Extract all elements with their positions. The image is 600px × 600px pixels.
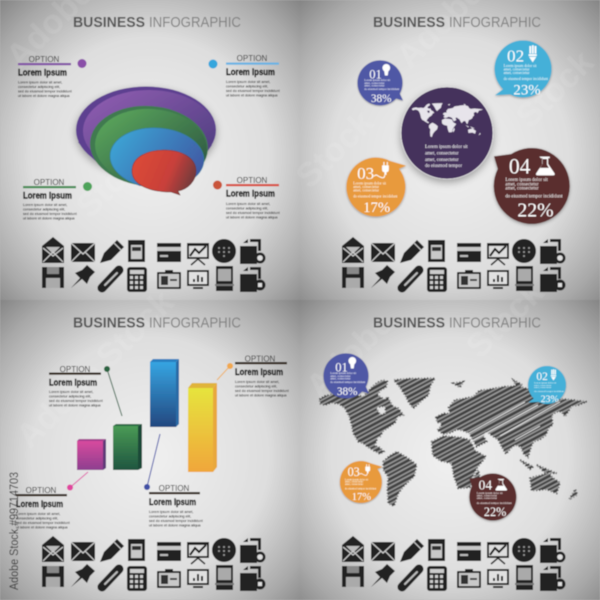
option: pink connector: Lorem ipsum dolor sit amet, — [16, 512, 60, 516]
icons: panel 3 — [42, 536, 266, 591]
option: pink connector: sed do eiusmod tempor incididunt — [16, 521, 70, 525]
bubble: 01 38%: 38% — [371, 93, 391, 105]
icon: mini world map — [412, 103, 483, 137]
option: blue: Lorem Ipsum — [226, 67, 275, 78]
option: purple: OPTION — [29, 55, 60, 64]
title: panel 2 — [373, 14, 541, 31]
bubble: map 03 17%: amet, consectetur — [345, 481, 363, 484]
option: red — [213, 176, 280, 220]
bubble: map 03 17%: Lorem ipsum dolor sit — [345, 478, 368, 481]
bubble: 01 38%: do eiusmod tempor incididunt — [364, 87, 399, 91]
option: orange connector: Lorem ipsum dolor sit amet, — [235, 380, 279, 384]
bubble: map 03 17%: 03 — [348, 465, 360, 479]
option: dark green connector: Lorem ipsum dolor sit amet, — [49, 390, 93, 394]
stock watermarks: Stock — [509, 43, 600, 136]
option: blue connector: OPTION — [159, 484, 190, 493]
bubble: 04 22%: do eiusmod tempor incididunt — [505, 194, 563, 199]
option: pink connector — [16, 472, 88, 530]
bubble: map 01 38% — [323, 353, 369, 398]
stock credit vertical: Adobe Stock #99714703 — [9, 472, 21, 590]
title: panel 1 — [73, 14, 241, 31]
option: dark green connector: OPTION — [60, 365, 91, 374]
bubble: 02 23%: amet, consectetur — [504, 71, 530, 76]
bubble: 02 23% — [495, 40, 552, 99]
bubble: 04 22%: amet, consectetur — [505, 182, 539, 187]
bubble: map 01 38%: Lorem ipsum dolor sit — [330, 371, 356, 375]
option: blue: OPTION — [237, 54, 268, 63]
bubble: 03 17%: do eiusmod tempor incididunt — [353, 195, 397, 199]
circle: world map centre: amet, consectetur — [425, 158, 459, 163]
chart: layered speech bubbles — [76, 86, 216, 195]
option: red: ut labore et dolore magna aliqua — [226, 216, 278, 220]
circle: world map centre: Lorem ipsum dolor sit — [425, 145, 468, 150]
option: dark green connector — [49, 365, 122, 416]
option: dark green connector: sed do eiusmod tempor incididunt — [49, 399, 103, 403]
option: blue connector: Lorem ipsum dolor sit amet, — [149, 510, 193, 514]
bubble: 04 22%: 22% — [517, 199, 554, 221]
stock watermarks: Stock — [69, 133, 161, 226]
title: panel 3: INFOGRAPHIC — [149, 314, 241, 332]
option: blue connector: consectetur adipiscing elit, — [149, 514, 191, 518]
option: blue: ut labore et dolore magna aliqua — [226, 94, 278, 98]
option: green: OPTION — [34, 178, 65, 187]
bar: yellow — [188, 383, 217, 472]
world map: scribbled — [319, 378, 587, 506]
bubble: 02 23%: Lorem ipsum dolor sit — [504, 64, 537, 68]
bubble: map 04 22%: amet, consectetur — [477, 496, 497, 501]
title: panel 2: INFOGRAPHIC — [449, 14, 541, 31]
bubble: map 02 23%: do eiusmod tempor incididunt — [534, 390, 564, 393]
bubble: 04 22%: 04 — [509, 154, 531, 178]
option: green: consectetur adipiscing elit, — [23, 208, 65, 212]
bubble: map 04 22% — [469, 473, 516, 520]
title: panel 1: INFOGRAPHIC — [149, 14, 241, 31]
bubble: 03 17% — [346, 158, 406, 217]
title: panel 1: BUSINESS — [73, 14, 145, 31]
option: green: Lorem ipsum dolor sit amet, — [23, 203, 67, 207]
bar: green — [113, 424, 142, 470]
bubble: map 04 22%: 04 — [479, 477, 492, 492]
bubble: 03 17%: amet, consectetur — [353, 188, 380, 193]
option: dark green connector: ut labore et dolore magna aliqua — [49, 404, 101, 408]
bubble: map 02 23%: Lorem ipsum dolor sit — [534, 382, 556, 385]
circle: world map centre — [401, 87, 493, 179]
option: purple: sed do eiusmod tempor incididunt — [18, 90, 72, 94]
bar: pink — [77, 439, 106, 470]
bubble: map 04 22%: do eiusmod tempor incididunt — [477, 501, 512, 505]
bubble: 01 38%: amet, consectetur — [364, 81, 385, 86]
option: green: sed do eiusmod tempor incididunt — [23, 212, 77, 216]
option: green: ut labore et dolore magna aliqua — [23, 216, 75, 220]
bubble: map 01 38%: 01 — [335, 360, 348, 374]
circle: world map centre: amet, consectetur — [425, 152, 459, 156]
option: pink connector: Lorem Ipsum — [16, 499, 63, 510]
option: dark green connector: Lorem Ipsum — [49, 378, 97, 388]
option: orange connector: ut labore et dolore magna aliqua — [235, 394, 287, 398]
bubble: map 04 22%: amet, consectetur — [477, 494, 497, 499]
bubble: 01 38%: Lorem ipsum dolor sit — [364, 78, 390, 82]
bubble: 01 38% — [357, 60, 403, 105]
option: orange connector — [217, 354, 289, 398]
bubble: map 02 23% — [528, 366, 566, 405]
option: green: Lorem Ipsum — [23, 190, 72, 202]
option: orange connector: sed do eiusmod tempor incididunt — [235, 389, 289, 393]
bubble: 02 23%: 23% — [513, 83, 541, 99]
option: purple — [18, 55, 86, 98]
option: orange connector: Lorem Ipsum — [235, 367, 283, 378]
bubble: 04 22%: Lorem ipsum dolor sit — [505, 178, 548, 183]
bubble: map 02 23%: amet, consectetur — [534, 384, 552, 387]
bubble: 04 22%: amet, consectetur — [505, 186, 539, 191]
option: blue connector — [144, 434, 203, 528]
option: red: OPTION — [237, 176, 268, 185]
option: red: sed do eiusmod tempor incididunt — [226, 211, 280, 215]
icons: panel 1 — [42, 237, 266, 292]
option: purple: ut labore et dolore magna aliqua — [18, 94, 70, 98]
option: blue connector: Lorem Ipsum — [149, 497, 196, 508]
option: purple: Lorem ipsum dolor sit amet, — [18, 80, 62, 84]
stock watermarks: Stock — [289, 103, 381, 196]
option: green — [23, 178, 92, 220]
option: dark green connector: consectetur adipiscing elit, — [49, 394, 91, 398]
title: panel 4 — [373, 314, 541, 332]
option: blue connector: ut labore et dolore magna aliqua — [149, 524, 201, 528]
bubble: 01 38%: amet, consectetur — [364, 84, 385, 89]
bar chart: 3D bars — [77, 359, 217, 472]
bubble: map 03 17%: do eiusmod tempor incididunt — [345, 488, 376, 491]
bubble: map 03 17% — [340, 461, 382, 503]
option: purple: Lorem Ipsum — [18, 68, 67, 78]
option: blue: Lorem ipsum dolor sit amet, — [226, 80, 270, 84]
option: pink connector: consectetur adipiscing elit, — [16, 516, 58, 520]
bubble: map 03 17%: 17% — [352, 492, 371, 503]
stock watermarks: Stock — [459, 273, 551, 366]
option: red: Lorem ipsum dolor sit amet, — [226, 202, 270, 206]
bubble: map 04 22%: 22% — [484, 505, 506, 519]
option: red: Lorem Ipsum — [226, 188, 275, 200]
title: panel 4: INFOGRAPHIC — [449, 314, 541, 332]
option: blue: sed do eiusmod tempor incididunt — [226, 89, 280, 93]
bubble: 04 22% — [494, 148, 570, 224]
bubble: map 01 38%: 38% — [337, 386, 357, 398]
bubble: map 02 23%: 02 — [536, 371, 548, 383]
bubble: map 02 23%: 23% — [541, 394, 559, 405]
option: pink connector: ut labore et dolore magna aliqua — [16, 526, 68, 530]
title: panel 2: BUSINESS — [373, 14, 445, 31]
bubble: map 01 38%: do eiusmod tempor incididunt — [330, 380, 365, 384]
option: pink connector: OPTION — [26, 486, 57, 495]
bubble: map 01 38%: amet, consectetur — [330, 377, 351, 382]
bubble: 02 23%: do eiusmod tempor incididunt — [504, 77, 548, 81]
bubble: 02 23%: amet, consectetur — [504, 67, 530, 72]
option: orange connector: consectetur adipiscing elit, — [235, 384, 277, 388]
bubble: 01 38%: 01 — [369, 67, 382, 81]
bubble: map 01 38%: amet, consectetur — [330, 374, 351, 379]
option: purple: consectetur adipiscing elit, — [18, 85, 60, 89]
bubble: 03 17%: 03 — [357, 164, 374, 183]
bubble: 03 17%: Lorem ipsum dolor sit — [353, 182, 386, 186]
bubble: map 02 23%: amet, consectetur — [534, 386, 552, 389]
option: blue: consectetur adipiscing elit, — [226, 84, 268, 88]
bubble: 02 23%: 02 — [507, 46, 524, 65]
stock watermarks: Stock — [89, 283, 181, 376]
title: panel 4: BUSINESS — [373, 314, 445, 332]
bubble: 03 17%: 17% — [363, 200, 390, 216]
title: panel 3 — [73, 314, 241, 332]
stock watermarks: Adobe — [299, 304, 400, 406]
bubble: map 03 17%: amet, consectetur — [345, 483, 363, 486]
option: orange connector: OPTION — [245, 354, 276, 364]
circle: world map centre: do eiusmod tempor — [425, 164, 462, 169]
title: panel 3: BUSINESS — [73, 314, 145, 332]
option: red: consectetur adipiscing elit, — [226, 206, 268, 210]
bar: blue — [150, 359, 179, 427]
icons: panel 4 — [342, 536, 566, 591]
bubble: map 04 22%: Lorem ipsum dolor sit — [477, 491, 503, 495]
icons: panel 2 — [342, 237, 566, 292]
bubble: 03 17%: amet, consectetur — [353, 185, 380, 190]
stock watermarks — [0, 0, 600, 456]
stock watermarks: Adobe — [9, 354, 110, 456]
option: blue — [208, 54, 280, 98]
option: blue connector: sed do eiusmod tempor incididunt — [149, 519, 203, 523]
